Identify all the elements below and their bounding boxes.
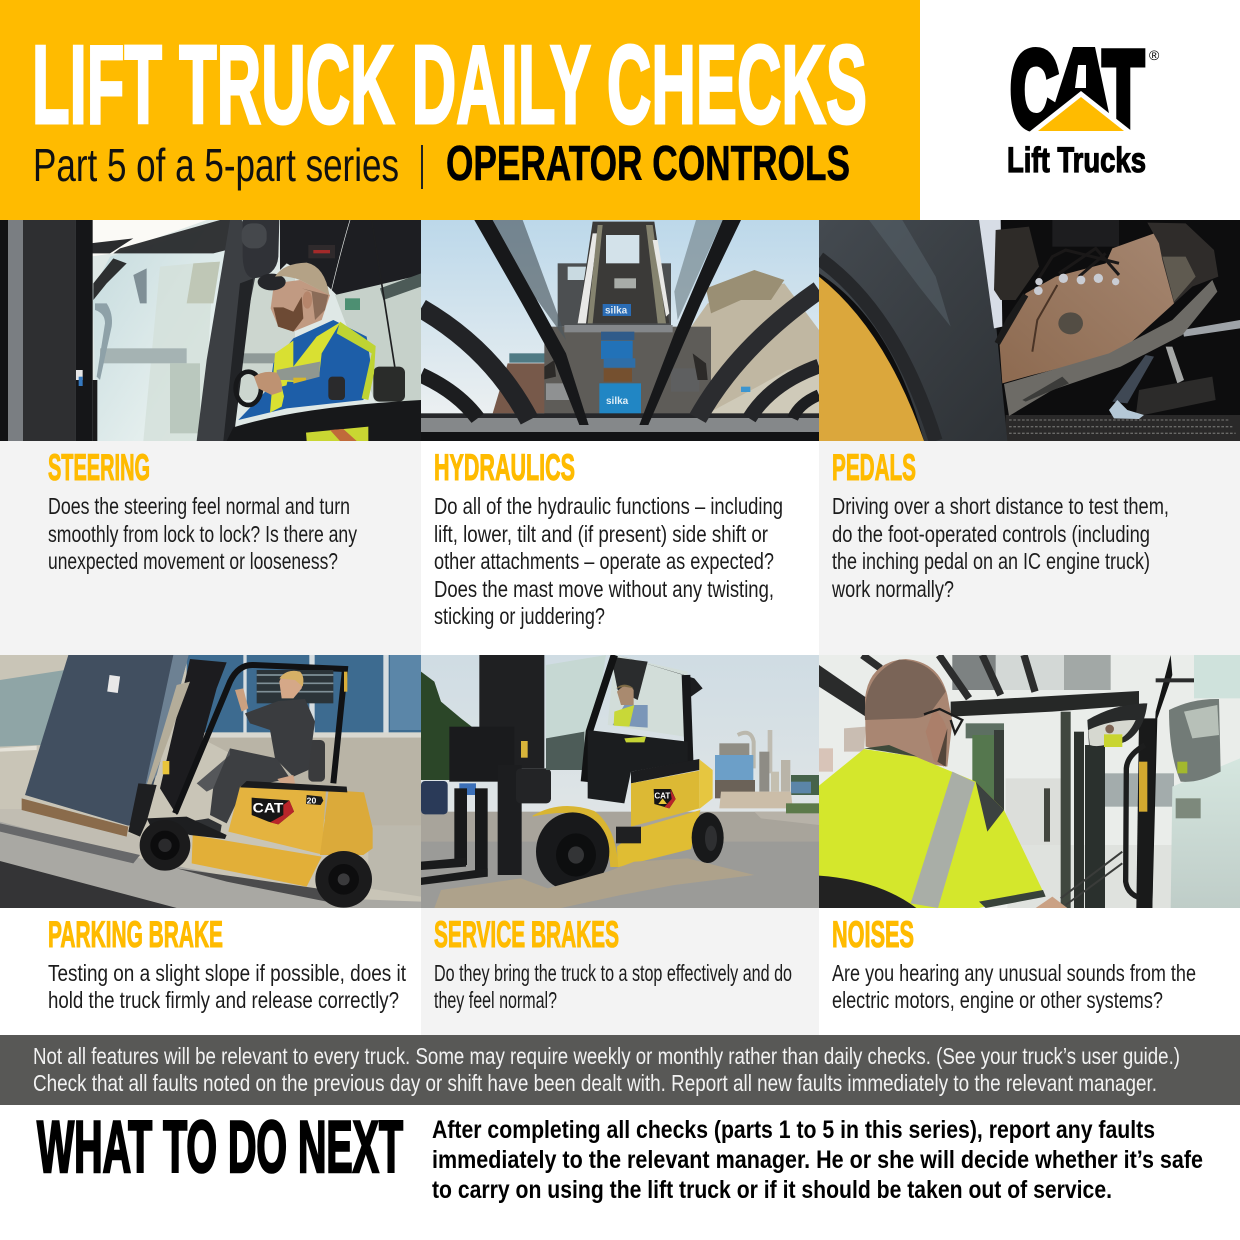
subtitle divider [421, 145, 423, 189]
body: pedals: the inching pedal on an IC engine truck) [832, 548, 1150, 574]
heading: pedals: PEDALS [832, 447, 916, 488]
subtitle: series: Part 5 of a 5-part series [33, 139, 399, 191]
body: pedals: work normally? [831, 576, 954, 602]
body: hydraulics: Does the mast move without any twisting, [434, 576, 774, 602]
photo: forklift driving through puddle [421, 655, 819, 908]
body: pedals: do the foot-operated controls (including [832, 521, 1150, 547]
photo: operator at steering wheel [0, 220, 421, 441]
logo: Cat Lift Trucks: CAT [1010, 29, 1144, 152]
body: steering: unexpected movement or looseness? [48, 548, 338, 574]
body: steering: smoothly from lock to lock? Is there any [48, 521, 357, 547]
subtitle: topic: OPERATOR CONTROLS [446, 137, 850, 191]
body: pedals [831, 493, 1169, 602]
panel: service brakes [421, 655, 819, 1035]
photo: mast seen through guard [421, 220, 819, 441]
panel: hydraulics [421, 220, 819, 655]
photo: operator from behind in hi-vis [819, 655, 1240, 908]
text block: what to do next: to carry on using the lift truck or if it should be taken out of service. [432, 1176, 1112, 1204]
heading: noises: NOISES [832, 914, 914, 955]
heading: steering: STEERING [48, 447, 150, 488]
body: hydraulics: other attachments – operate as expected? [434, 548, 774, 574]
body: hydraulics: Do all of the hydraulic functions – including [434, 493, 783, 519]
body: steering: Does the steering feel normal and turn [48, 493, 350, 519]
panel: steering [0, 220, 421, 655]
photo: forklift driving through puddle: CAT [654, 790, 671, 800]
header banner [0, 0, 920, 220]
body: hydraulics: sticking or juddering? [434, 603, 605, 629]
text block: what to do next [432, 1116, 1203, 1204]
body: service brakes: Do they bring the truck to a stop effectively and do [434, 960, 792, 986]
panel: noises [819, 655, 1240, 1035]
heading: service brakes: SERVICE BRAKES [434, 914, 619, 955]
photo: mast seen through guard: silka [605, 305, 628, 316]
body: hydraulics [434, 493, 783, 629]
body: hydraulics: lift, lower, tilt and (if present) side shift or [434, 521, 768, 547]
body: steering [48, 493, 357, 574]
heading: what to do next: WHAT TO DO NEXT [37, 1107, 403, 1188]
body: parking brake [48, 960, 406, 1013]
note banner [0, 1035, 1240, 1105]
body: parking brake: hold the truck firmly and release correctly? [48, 987, 399, 1013]
panel: parking brake [0, 655, 421, 1035]
logo: Cat Lift Trucks: Lift Trucks [1007, 141, 1146, 180]
photo: forklift on slope with load: 20 [307, 796, 316, 806]
photo: forklift on slope with load [0, 655, 421, 908]
heading: parking brake: PARKING BRAKE [48, 914, 223, 955]
panel: pedals [819, 220, 1240, 655]
body: noises [832, 960, 1196, 1013]
body: service brakes: they feel normal? [434, 987, 557, 1013]
photo: boot on pedal [819, 220, 1240, 441]
logo: Cat Lift Trucks [1007, 29, 1160, 180]
logo: Cat Lift Trucks: ® [1149, 47, 1160, 63]
photo: mast seen through guard: silka [606, 396, 629, 407]
body: parking brake: Testing on a slight slope if possible, does it [48, 960, 406, 986]
heading: hydraulics: HYDRAULICS [434, 447, 575, 488]
photo: forklift on slope with load: CAT [253, 799, 284, 815]
body: service brakes [434, 960, 792, 1013]
